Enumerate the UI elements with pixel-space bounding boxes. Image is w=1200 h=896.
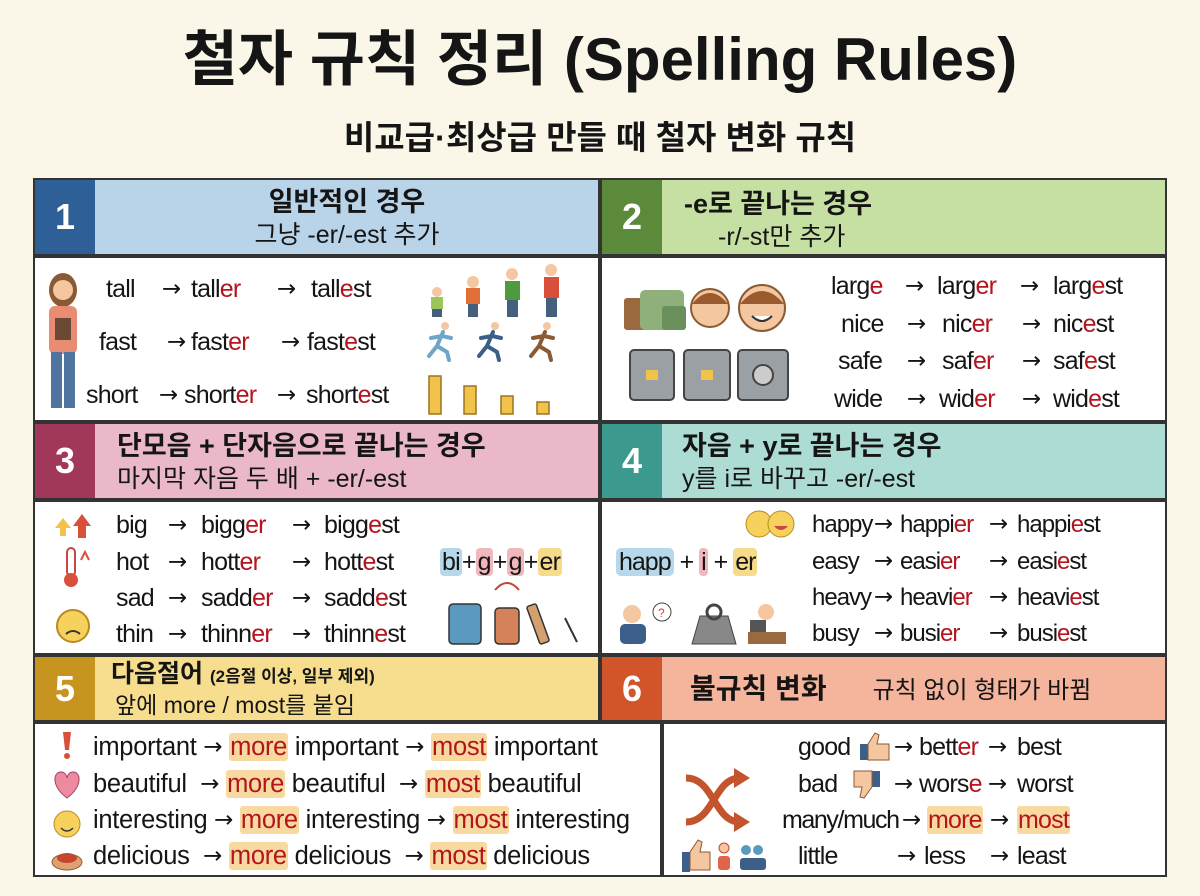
- panel 5 content: interesting → more interesting → most interesting: [93, 806, 630, 834]
- panel 1 content: fastest: [307, 328, 375, 356]
- panel 4 content: →: [874, 620, 892, 646]
- panel 1 content: →: [159, 382, 177, 408]
- text: bad row: bad: [798, 770, 837, 798]
- panel 6 content: better: [919, 733, 978, 761]
- number 3: 3: [55, 440, 75, 481]
- panel 6 content: →: [902, 807, 920, 833]
- panel 1 content: taller: [191, 275, 240, 303]
- panel 6 content: →: [897, 843, 915, 869]
- panel 4 content: [600, 500, 1167, 655]
- panel 4 content: heaviest: [1017, 584, 1098, 611]
- heading 5: 다음절어 (2음절 이상, 일부 제외): [111, 660, 375, 688]
- panel 6 content: best: [1017, 733, 1061, 761]
- panel 4 content: →: [989, 548, 1007, 574]
- panel 3 content: bigger: [201, 511, 266, 539]
- text: more/most rows: important → more important → most important: [93, 733, 597, 761]
- panel 4 content: →: [989, 511, 1007, 537]
- panel 4 content: →: [874, 584, 892, 610]
- panel 6 content: →: [894, 734, 912, 760]
- panel 5 content: delicious → more delicious → most delicious: [93, 842, 590, 870]
- number 4: [602, 424, 662, 498]
- panel 6 content: least: [1017, 842, 1066, 870]
- panel 1 content: →: [277, 276, 295, 302]
- panel 6 content: [662, 722, 1167, 877]
- panel 2 content: →: [905, 273, 923, 299]
- number 5: [35, 657, 95, 720]
- panel 3 content: →: [168, 621, 186, 647]
- panel 3 content: saddest: [324, 584, 406, 612]
- panel 3 content: →: [168, 549, 186, 575]
- panel 2 content: [600, 256, 1167, 422]
- panel 3 content: →: [292, 621, 310, 647]
- icon: shuffle arrows: [686, 768, 750, 832]
- heading 1: [254, 187, 440, 249]
- panel 3 content: →: [292, 512, 310, 538]
- panel 1 content: →: [167, 329, 185, 355]
- icon: boxes and faces: [624, 284, 789, 401]
- heading 4: y를 i로 바꾸고 -er/-est: [682, 465, 915, 493]
- panel 2 content: →: [1022, 311, 1040, 337]
- heading 1: 그냥 -er/-est 추가: [254, 221, 440, 249]
- panel 4 content: happiest: [1017, 511, 1100, 538]
- panel 3 content: biggest: [324, 511, 399, 539]
- panel 2 content: →: [1020, 273, 1038, 299]
- heading 6: 불규칙 변화 규칙 없이 형태가 바뀜: [690, 673, 1091, 704]
- diagram: happ+i+er: happ + i + er: [619, 548, 755, 576]
- panel 3 content: thinnest: [324, 620, 405, 648]
- panel 6 content: less: [924, 842, 965, 870]
- number 2: 2: [622, 196, 642, 237]
- panel 4 content: busiest: [1017, 620, 1086, 647]
- panel 4 content: →: [989, 584, 1007, 610]
- panel 6 content: →: [988, 771, 1006, 797]
- icons: exclamation, heart, smiley, dish: [52, 732, 82, 870]
- text: many/much row: many/much: [782, 806, 899, 834]
- panel 2 content: widest: [1053, 385, 1119, 413]
- panel 3 content: sad: [116, 584, 154, 612]
- title: 철자 규칙 정리 (Spelling Rules): [183, 26, 1017, 93]
- text: fast row: fast: [99, 328, 136, 356]
- heading 5: [111, 660, 375, 718]
- text: tall row: tall: [106, 275, 135, 303]
- number 2: [602, 180, 662, 254]
- panel 4 content: →: [874, 511, 892, 537]
- icon: happy faces: [746, 510, 794, 538]
- text: big rows: big: [116, 511, 147, 539]
- panel 6 content: most: [1018, 806, 1069, 834]
- number 6: [602, 657, 662, 720]
- panel 6 content: worst: [1017, 770, 1073, 798]
- icon: thumbs up: [860, 732, 890, 760]
- icon: thumbs down: [854, 770, 880, 799]
- number 5: 5: [55, 668, 75, 708]
- icon: people heights: [431, 264, 559, 317]
- text: e rows: large: [831, 272, 883, 300]
- panel 4 content: easier: [900, 548, 959, 575]
- panel 6 content: →: [990, 843, 1008, 869]
- panel 6 content: more: [928, 806, 982, 834]
- panel 1 content: tallest: [311, 275, 371, 303]
- panel 4 content: easy: [812, 548, 859, 575]
- panel 5 content: beautiful → more beautiful → most beautiful: [93, 770, 581, 798]
- icon: bars: [428, 375, 550, 415]
- icon: runners: [426, 322, 555, 362]
- panel 2 content: →: [907, 348, 925, 374]
- panel 3 content: →: [168, 512, 186, 538]
- panel 1 content: →: [162, 276, 180, 302]
- panel 4 header: [600, 422, 1167, 500]
- panel 2 content: safe: [838, 347, 882, 375]
- text: good row: good: [798, 733, 850, 761]
- panel 4 content: heavier: [900, 584, 972, 611]
- panel 1 content: faster: [191, 328, 249, 356]
- panel 1 content: shorter: [184, 381, 256, 409]
- panel 3 header: [33, 422, 600, 500]
- panel 3 content: hot: [116, 548, 148, 576]
- diagram: bi+g+g+er: bi+g+g+er: [442, 548, 560, 576]
- panel 3 content: [33, 500, 600, 655]
- panel 3 content: thinner: [201, 620, 272, 648]
- icons: thumbs and people: [682, 839, 766, 872]
- panel 1 content: [33, 256, 600, 422]
- panel: grid frame: [33, 178, 1167, 877]
- panel 3 content: →: [292, 549, 310, 575]
- icons: person, weight, worker: ?: [658, 606, 665, 620]
- panel 6 content: →: [894, 771, 912, 797]
- panel 2 content: wide: [834, 385, 882, 413]
- number 4: 4: [622, 440, 642, 481]
- panel 6 content: worse: [919, 770, 982, 798]
- subtitle: 비교급·최상급 만들 때 철자 변화 규칙: [344, 119, 856, 156]
- panel 2 content: wider: [939, 385, 995, 413]
- panel 3 content: hottest: [324, 548, 393, 576]
- panel 2 header: [600, 178, 1167, 256]
- panel 2 content: nicest: [1053, 310, 1114, 338]
- panel 2 content: safer: [942, 347, 994, 375]
- panel 2 content: nicer: [942, 310, 992, 338]
- panel 4 content: easiest: [1017, 548, 1086, 575]
- heading 1: 일반적인 경우: [269, 187, 425, 217]
- icons: arrows, thermometer, face: [55, 514, 91, 643]
- panel 5 header: [33, 655, 600, 722]
- panel 4 content: →: [874, 548, 892, 574]
- panel 3 content: sadder: [201, 584, 273, 612]
- heading 2: [684, 189, 872, 251]
- panel 5 content: [33, 722, 662, 877]
- panel 6 header: [600, 655, 1167, 722]
- panel 3 content: hotter: [201, 548, 260, 576]
- panel 4 content: →: [989, 620, 1007, 646]
- heading 4: [682, 431, 942, 493]
- panel 3 content: thin: [116, 620, 153, 648]
- heading 4: 자음 + y로 끝나는 경우: [682, 431, 942, 461]
- panel 4 content: busy: [812, 620, 859, 647]
- panel 2 content: →: [907, 311, 925, 337]
- panel 1 content: →: [281, 329, 299, 355]
- panel 1 content: →: [277, 382, 295, 408]
- heading 3: [117, 431, 486, 493]
- panel 2 content: nice: [841, 310, 884, 338]
- panel 3 content: →: [168, 585, 186, 611]
- panel 2 content: largest: [1053, 272, 1122, 300]
- icon: teacher: [49, 273, 77, 408]
- panel 2 content: safest: [1053, 347, 1115, 375]
- icon: cylinders: [448, 582, 578, 645]
- icons: person, weight, worker: [620, 602, 786, 644]
- number 6: 6: [622, 668, 642, 708]
- panel 1 content: shortest: [306, 381, 389, 409]
- panel 2 content: →: [907, 386, 925, 412]
- text: little row: little: [798, 842, 838, 870]
- panel 4 content: busier: [900, 620, 959, 647]
- heading 2: -r/-st만 추가: [718, 223, 845, 251]
- panel 3 content: →: [292, 585, 310, 611]
- heading 3: 단모음 + 단자음으로 끝나는 경우: [117, 431, 486, 461]
- panel 2 content: →: [1022, 386, 1040, 412]
- heading 5: 앞에 more / most를 붙임: [115, 692, 355, 718]
- panel 1 header: [33, 178, 600, 256]
- number 1: 1: [55, 196, 75, 237]
- number 1: [35, 180, 95, 254]
- panel 6 content: →: [988, 734, 1006, 760]
- panel 4 content: heavy: [812, 584, 871, 611]
- number 3: [35, 424, 95, 498]
- text: y rows: happy: [812, 511, 872, 538]
- heading 3: 마지막 자음 두 배 + -er/-est: [117, 465, 407, 493]
- heading 2: -e로 끝나는 경우: [684, 189, 872, 219]
- text: short row: short: [86, 381, 138, 409]
- panel 2 content: larger: [937, 272, 996, 300]
- panel 4 content: happier: [900, 511, 973, 538]
- panel 2 content: →: [1022, 348, 1040, 374]
- panel 6 content: →: [990, 807, 1008, 833]
